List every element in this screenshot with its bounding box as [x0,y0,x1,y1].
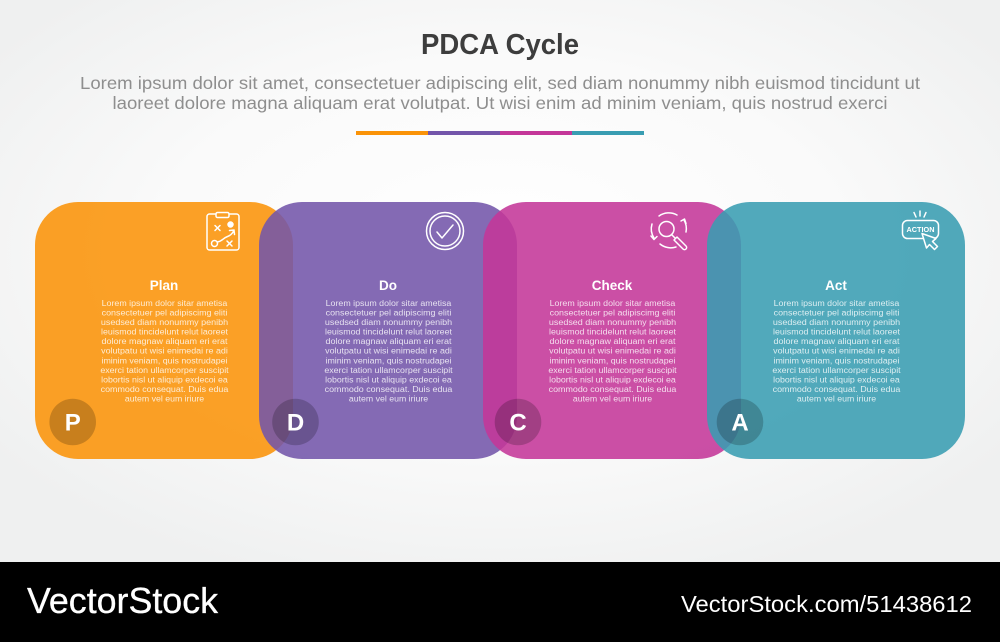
badge: A: A [731,410,749,436]
badge: A [717,399,763,445]
panel: act [707,202,965,459]
act text: autem vel eum iriure [797,394,877,404]
do text: volutpatu ut wisi enimedai re adi [325,347,452,356]
plan text: exerci tation ullamcorper suscipit [100,366,230,375]
plan text: volutpatu ut wisi enimedai re adi [101,347,228,356]
act text: exerci tation ullamcorper suscipit [772,366,902,375]
check text: exerci tation ullamcorper suscipit [548,366,678,375]
subtitle text: Lorem ipsum dolor sit amet, consectetuer adipiscing elit, sed diam nonummy nibh euismod tincidunt ut [80,73,920,93]
do text: dolore magnaw aliquam eri erat [326,337,452,346]
badge: D: D [287,410,304,436]
check text: Lorem ipsum dolor sitar ametisa [550,299,676,308]
act text: volutpatu ut wisi enimedai re adi [773,347,900,356]
plan text: commodo consequat. Duis edua [101,385,229,394]
act text: dolore magnaw aliquam eri erat [774,337,900,346]
act text: iminim veniam, quis nostrudapei [774,356,900,365]
plan text: usedsed diam nonummy penibh [101,318,228,327]
check text: usedsed diam nonummy penibh [549,318,676,327]
icon: do check mark [426,212,464,250]
do text: commodo consequat. Duis edua [325,385,453,394]
act text: Lorem ipsum dolor sitar ametisa [774,299,900,308]
act text: usedsed diam nonummy penibh [773,318,900,327]
do text: Do [379,278,397,293]
colour divider bar [356,131,644,135]
do text: Lorem ipsum dolor sitar ametisa [326,299,452,308]
act text: commodo consequat. Duis edua [773,385,901,394]
check text: leuismod tincidelunt relut laoreet [549,328,677,337]
check text: consectetuer pel adipiscimg eliti [550,308,676,318]
do text: usedsed diam nonummy penibh [325,318,452,327]
badge: C: C [509,410,527,436]
do text: lobortis nisl ut aliquip exdecoi ea [325,375,452,384]
do text: leuismod tincidelunt relut laoreet [325,328,453,337]
act text: consectetuer pel adipiscimg eliti [774,308,900,318]
panel: plan [35,202,293,459]
icon: plan clipboard [207,212,239,250]
plan text: lobortis nisl ut aliquip exdecoi ea [101,375,228,384]
plan text: iminim veniam, quis nostrudapei [102,356,228,365]
subtitle text: laoreet dolore magna aliquam erat volutpat. Ut wisi enim ad minim veniam, quis nostrud exerci [112,93,888,113]
check text: volutpatu ut wisi enimedai re adi [549,347,676,356]
do text: iminim veniam, quis nostrudapei [326,356,452,365]
footer url: VectorStock.com/51438612 [681,591,972,617]
act text: Act [825,278,847,293]
do text: consectetuer pel adipiscimg eliti [326,308,452,318]
badge: D [272,399,319,445]
do text [324,278,454,404]
check text [548,278,678,404]
check text: iminim veniam, quis nostrudapei [550,356,676,365]
act text: lobortis nisl ut aliquip exdecoi ea [773,375,900,384]
check text: lobortis nisl ut aliquip exdecoi ea [549,375,676,384]
icon: check magnifier [651,213,687,250]
icon: act button [902,211,938,250]
plan text: autem vel eum iriure [125,394,205,404]
title: PDCA Cycle [421,29,579,61]
footer band [0,562,1000,642]
do text: exerci tation ullamcorper suscipit [324,366,454,375]
do text: autem vel eum iriure [349,394,429,404]
subtitle text [80,73,920,113]
plan text: consectetuer pel adipiscimg eliti [102,308,228,318]
plan text: dolore magnaw aliquam eri erat [102,337,228,346]
plan text: Lorem ipsum dolor sitar ametisa [102,299,228,308]
check text: dolore magnaw aliquam eri erat [550,337,676,346]
footer logo text: VectorStock [27,580,219,621]
plan text: Plan [150,278,178,293]
check text: commodo consequat. Duis edua [549,385,677,394]
icon: act button: ACTION [906,225,934,234]
badge: P: P [65,410,81,436]
badge: C [495,399,541,445]
check text: autem vel eum iriure [573,394,653,404]
check text: Check [592,278,633,293]
panel: do [259,202,517,459]
act text: leuismod tincidelunt relut laoreet [773,328,901,337]
act text [772,278,902,404]
badge: P [49,399,96,445]
panel: check [483,202,741,459]
plan text [100,278,230,404]
plan text: leuismod tincidelunt relut laoreet [101,328,229,337]
